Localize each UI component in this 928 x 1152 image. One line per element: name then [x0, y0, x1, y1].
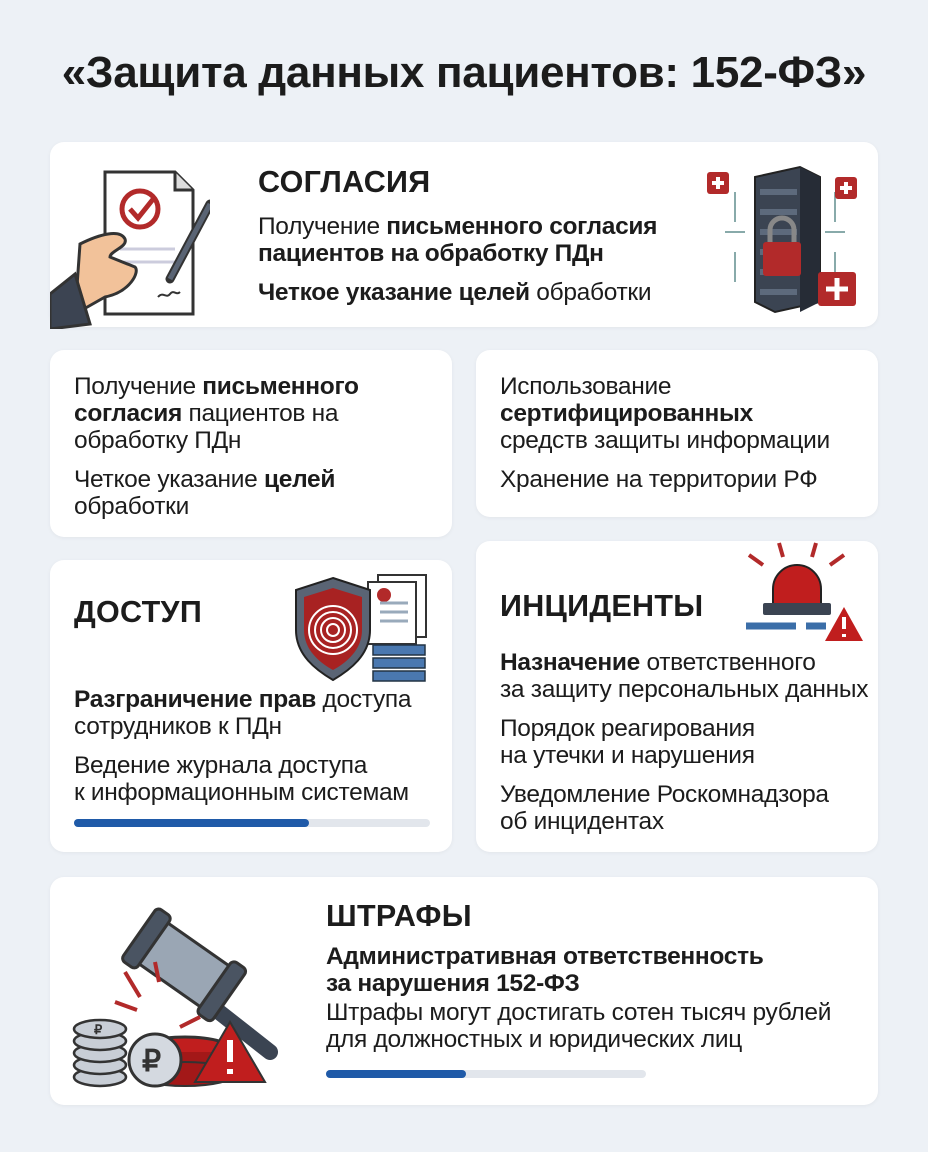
text block: обработку ПДн: [74, 427, 241, 454]
text block: Получение письменного: [74, 373, 359, 400]
text block: за защиту персональных данных: [500, 676, 868, 703]
text block: [74, 686, 412, 806]
text block: [500, 649, 868, 835]
text block: для должностных и юридических лиц: [326, 1026, 742, 1053]
panel: согласия (detail): [50, 350, 452, 537]
text block: Административная ответственность: [326, 943, 764, 970]
text block: Порядок реагирования: [500, 715, 755, 742]
heading: СОГЛАСИЯ: [258, 165, 430, 199]
panel: штрафы: [50, 877, 878, 1105]
progress bar: [74, 819, 430, 827]
text block: Ведение журнала доступа: [74, 752, 367, 779]
text block: Разграничение прав доступа: [74, 686, 411, 713]
text block: согласия пациентов на: [74, 400, 338, 427]
text block: [326, 943, 831, 1053]
text block: Использование: [500, 373, 671, 400]
text block: Четкое указание целей обработки: [258, 279, 651, 306]
text block: Назначение ответственного: [500, 649, 816, 676]
text block: сотрудников к ПДн: [74, 713, 282, 740]
text block: [74, 373, 359, 520]
icon: gavel with coins: ₽: [142, 1045, 161, 1078]
heading: ДОСТУП: [74, 595, 202, 629]
text block: Штрафы могут достигать сотен тысяч рублей: [326, 999, 831, 1026]
icon: document with hand and pen: [50, 170, 210, 329]
text block: [500, 373, 830, 493]
panel: инциденты: [476, 541, 878, 852]
heading: ИНЦИДЕНТЫ: [500, 589, 703, 623]
text block: [258, 213, 657, 306]
text block: Уведомление Роскомнадзора: [500, 781, 829, 808]
text block: Хранение на территории РФ: [500, 466, 817, 493]
panel: хранение: [476, 350, 878, 517]
panel: согласия: [50, 142, 878, 327]
text block: к информационным системам: [74, 779, 409, 806]
heading: ШТРАФЫ: [326, 899, 472, 933]
text block: об инцидентах: [500, 808, 664, 835]
text block: обработки: [74, 493, 189, 520]
icon: gavel with coins: ₽: [94, 1022, 103, 1037]
text block: Получение письменного согласия: [258, 213, 657, 240]
progress bar: [326, 1070, 646, 1078]
text block: сертифицированных: [500, 400, 753, 427]
title: «Защита данных пациентов: 152-ФЗ»: [62, 48, 866, 97]
icon: gavel with coins: [72, 908, 278, 1088]
text block: пациентов на обработку ПДн: [258, 240, 604, 267]
panel: доступ: [50, 560, 452, 852]
text block: на утечки и нарушения: [500, 742, 755, 769]
text block: за нарушения 152-ФЗ: [326, 970, 580, 997]
icon: server with lock: [707, 166, 857, 313]
icon: alarm siren: [746, 542, 863, 641]
text block: Четкое указание целей: [74, 466, 335, 493]
icon: shield with fingerprint and files: [295, 574, 427, 682]
text block: средств защиты информации: [500, 427, 830, 454]
